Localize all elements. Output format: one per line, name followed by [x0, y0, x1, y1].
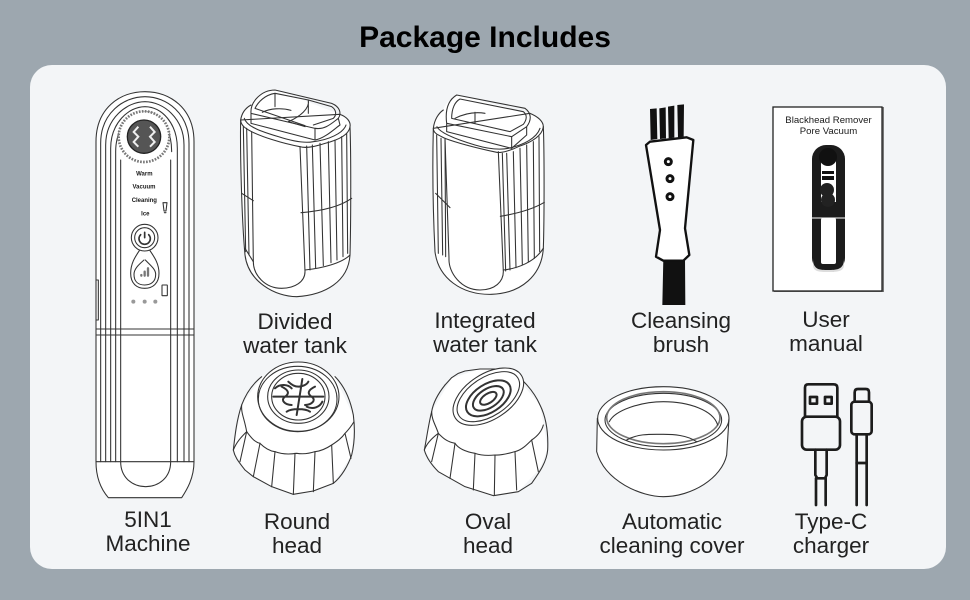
label: divided water tank: Divided	[257, 309, 333, 334]
icon: divided water tank	[241, 89, 352, 297]
icon: automatic cleaning cover	[597, 387, 729, 497]
icon: 5-in-1 machine: Warm	[136, 171, 153, 177]
label: 5IN1 Machine: Machine	[105, 531, 191, 556]
label: integrated water tank: Integrated	[434, 308, 536, 333]
icon: user manual	[773, 107, 884, 292]
icon: oval head	[424, 356, 548, 496]
label: cleansing brush: Cleansing	[631, 308, 731, 333]
icon: 5-in-1 machine	[96, 92, 194, 498]
icon: 5-in-1 machine: Ice	[141, 211, 150, 217]
icon: 5-in-1 machine: Vacuum	[133, 185, 155, 191]
label: round head: Round	[264, 509, 330, 534]
label: cleansing brush: brush	[653, 332, 709, 357]
icon: round head	[233, 362, 354, 494]
title: Package Includes	[359, 21, 611, 54]
label: automatic cleaning cover: Automatic	[622, 509, 722, 534]
label: user manual: User	[802, 307, 850, 332]
label: type-c charger: charger	[793, 533, 870, 558]
icon: user manual: Blackhead Remover	[785, 115, 872, 126]
icon: cleansing brush	[646, 104, 693, 305]
label: oval head: Oval	[465, 509, 511, 534]
icon: type-c charger	[802, 384, 872, 505]
icon: 5-in-1 machine: Cleaning	[132, 198, 157, 204]
label: integrated water tank: water tank	[432, 332, 538, 357]
label: automatic cleaning cover: cleaning cover	[599, 533, 745, 558]
icon: integrated water tank	[433, 95, 544, 294]
panel: package contents	[30, 65, 946, 569]
label: round head: head	[272, 533, 322, 558]
label: oval head: head	[463, 533, 513, 558]
label: 5IN1 Machine: 5IN1	[124, 507, 172, 532]
label: divided water tank: water tank	[242, 333, 348, 358]
icon: user manual: Pore Vacuum	[800, 126, 857, 137]
label: type-c charger: Type-C	[795, 509, 867, 534]
label: user manual: manual	[789, 331, 863, 356]
